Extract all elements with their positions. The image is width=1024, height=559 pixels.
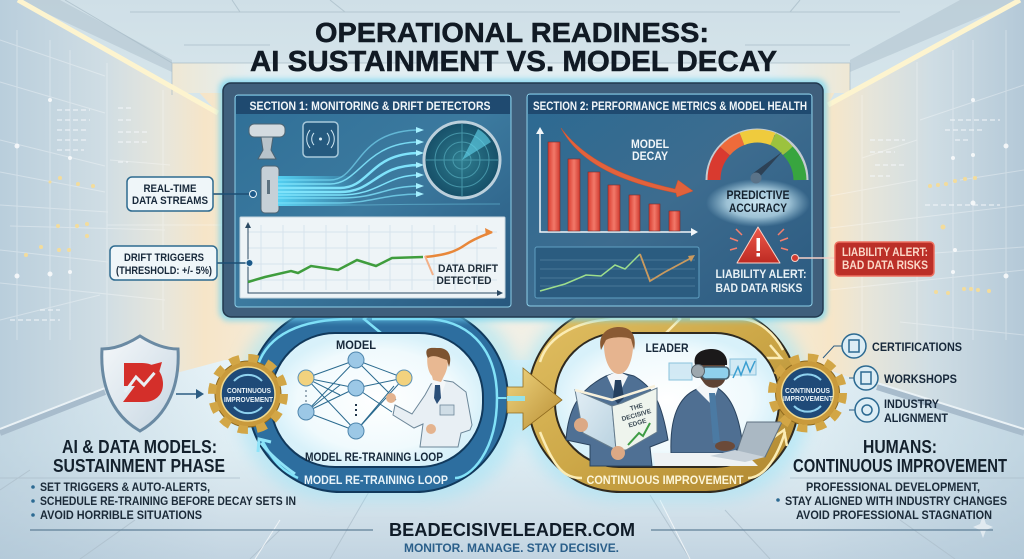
callout: drift triggers: DRIFT TRIGGERS	[124, 252, 204, 264]
gauge: predictive accuracy: ACCURACY	[729, 203, 787, 215]
panel: section 2 performance	[527, 94, 812, 306]
leader pill interior	[555, 327, 782, 467]
glow behind loops	[238, 300, 810, 500]
arrow chevron: top of blue loop	[364, 306, 381, 333]
icon: satellite dish	[249, 124, 285, 159]
list: certifications	[823, 334, 962, 358]
book: the decisive edge	[575, 386, 657, 450]
heading: section 2: SECTION 2: PERFORMANCE METRICS & MODEL HEALTH	[533, 101, 807, 113]
footer: tagline: MONITOR. MANAGE. STAY DECISIVE.	[404, 541, 619, 555]
list: sustainment bullets	[31, 480, 296, 522]
arrow: decay trend	[561, 128, 693, 197]
callout: liability alert	[792, 242, 934, 276]
icon: gear right	[772, 358, 843, 428]
label: leader: LEADER	[646, 343, 689, 355]
list: industry alignment: ALIGNMENT	[884, 411, 949, 425]
leader figure holding book	[566, 327, 668, 466]
list: workshops: WORKSHOPS	[884, 372, 957, 386]
title: AI SUSTAINMENT VS. MODEL DECAY	[250, 46, 777, 78]
callout: real-time data streams: REAL-TIME	[144, 183, 196, 195]
floor	[0, 360, 1024, 559]
label: predictive accuracy: PREDICTIVE	[726, 190, 790, 202]
label: liability alert inside panel: BAD DATA RISKS	[716, 283, 803, 295]
callout: real-time data streams	[127, 177, 256, 211]
callout: drift triggers	[110, 246, 253, 280]
heading: humans	[793, 437, 1007, 476]
title	[250, 17, 777, 78]
callout: liability alert: LIABILITY ALERT:	[842, 247, 928, 259]
blue loop: model re-training	[247, 304, 509, 493]
heading: ai and data models	[53, 437, 225, 476]
gauge: predictive accuracy	[706, 130, 810, 227]
label: liability alert inside panel	[716, 269, 806, 295]
heading: ai and data models: AI & DATA MODELS:	[62, 437, 217, 457]
label: model: MODEL	[336, 340, 376, 352]
heading: humans: HUMANS:	[863, 437, 937, 457]
bar chart: decay	[536, 127, 698, 236]
icon: gear left	[212, 358, 284, 430]
list: humans bullets: PROFESSIONAL DEVELOPMENT,	[806, 480, 980, 494]
icon: signal sensor	[303, 122, 338, 157]
wall grid lines	[0, 30, 1024, 350]
heading: ai and data models: SUSTAINMENT PHASE	[53, 456, 225, 476]
label: continuous improvement: CONTINUOUS IMPROVEMENT	[586, 475, 744, 487]
book: the decisive edge: THE	[629, 402, 644, 413]
callout: drift triggers: (THRESHOLD: +/- 5%)	[116, 265, 212, 277]
icon: radar	[424, 122, 500, 198]
footer rules	[30, 529, 993, 531]
label: liability alert inside panel: LIABILITY ALERT:	[716, 269, 806, 281]
label: model re-training loop inner: MODEL RE-TRAINING LOOP	[305, 452, 443, 464]
title: OPERATIONAL READINESS:	[315, 17, 709, 48]
book: the decisive edge: DECISIVE	[621, 408, 653, 423]
floating chart screens	[669, 359, 756, 380]
data stream flow lines	[278, 130, 500, 206]
icon: gear left: CONTINUOUS	[227, 386, 271, 395]
book: the decisive edge: EDGE	[628, 417, 648, 429]
footer: website: BEADECISIVELEADER.COM	[389, 520, 635, 540]
icon: shield logo	[102, 336, 178, 431]
list: humans bullets: AVOID PROFESSIONAL STAGNATION	[796, 508, 992, 522]
label: model decay: MODEL	[631, 139, 669, 151]
icon: data stream emitter	[261, 166, 279, 213]
list: industry alignment	[849, 397, 949, 425]
label chart: drift line chart: DETECTED	[436, 275, 492, 287]
arrow: shield to gear	[176, 389, 204, 399]
ceiling light strips	[18, 0, 1020, 113]
label: data drift detected: DATA DRIFT	[438, 263, 498, 275]
glow behind panel	[219, 79, 827, 321]
small line chart	[535, 247, 699, 298]
icon: gear left: IMPROVEMENT	[224, 395, 273, 404]
ceiling and back wall	[18, 0, 1020, 113]
label: model re-training loop: MODEL RE-TRAINING LOOP	[304, 475, 448, 487]
icon: gear right: CONTINUOUS	[785, 386, 830, 395]
arrow: centre link between loops	[507, 368, 562, 430]
list: sustainment bullets: AVOID HORRIBLE SITUATIONS	[40, 508, 202, 522]
icon: liability warning triangle	[730, 227, 788, 263]
neural network diagram	[298, 352, 412, 439]
callout: liability alert: BAD DATA RISKS	[842, 260, 928, 272]
analyst figure with VR headset	[653, 349, 782, 466]
list: humans bullets	[776, 480, 1007, 522]
list: industry alignment: INDUSTRY	[884, 397, 939, 411]
list: certifications: CERTIFICATIONS	[872, 340, 962, 354]
model pill interior	[271, 333, 483, 467]
callout: real-time data streams: DATA STREAMS	[132, 195, 208, 207]
list: workshops	[849, 366, 957, 390]
arrow: lower-left loop	[258, 439, 295, 474]
bar chart: decay: DECAY	[632, 151, 668, 163]
label chart: drift line chart	[240, 217, 505, 298]
arrow chevrons: gold loop	[666, 305, 787, 446]
list: sustainment bullets: SET TRIGGERS & AUTO-ALERTS,	[40, 480, 210, 494]
sparkle	[973, 515, 993, 538]
list: sustainment bullets: SCHEDULE RE-TRAINING BEFORE DECAY SETS IN	[40, 494, 296, 508]
scientist figure	[386, 348, 472, 447]
gold loop: continuous improvement	[527, 304, 800, 493]
panel: section 1 monitoring	[235, 95, 511, 307]
heading: section 1: SECTION 1: MONITORING & DRIFT DETECTORS	[250, 101, 491, 113]
main dashboard panel frame	[223, 83, 823, 317]
icon: gear right: IMPROVEMENT	[783, 394, 833, 403]
